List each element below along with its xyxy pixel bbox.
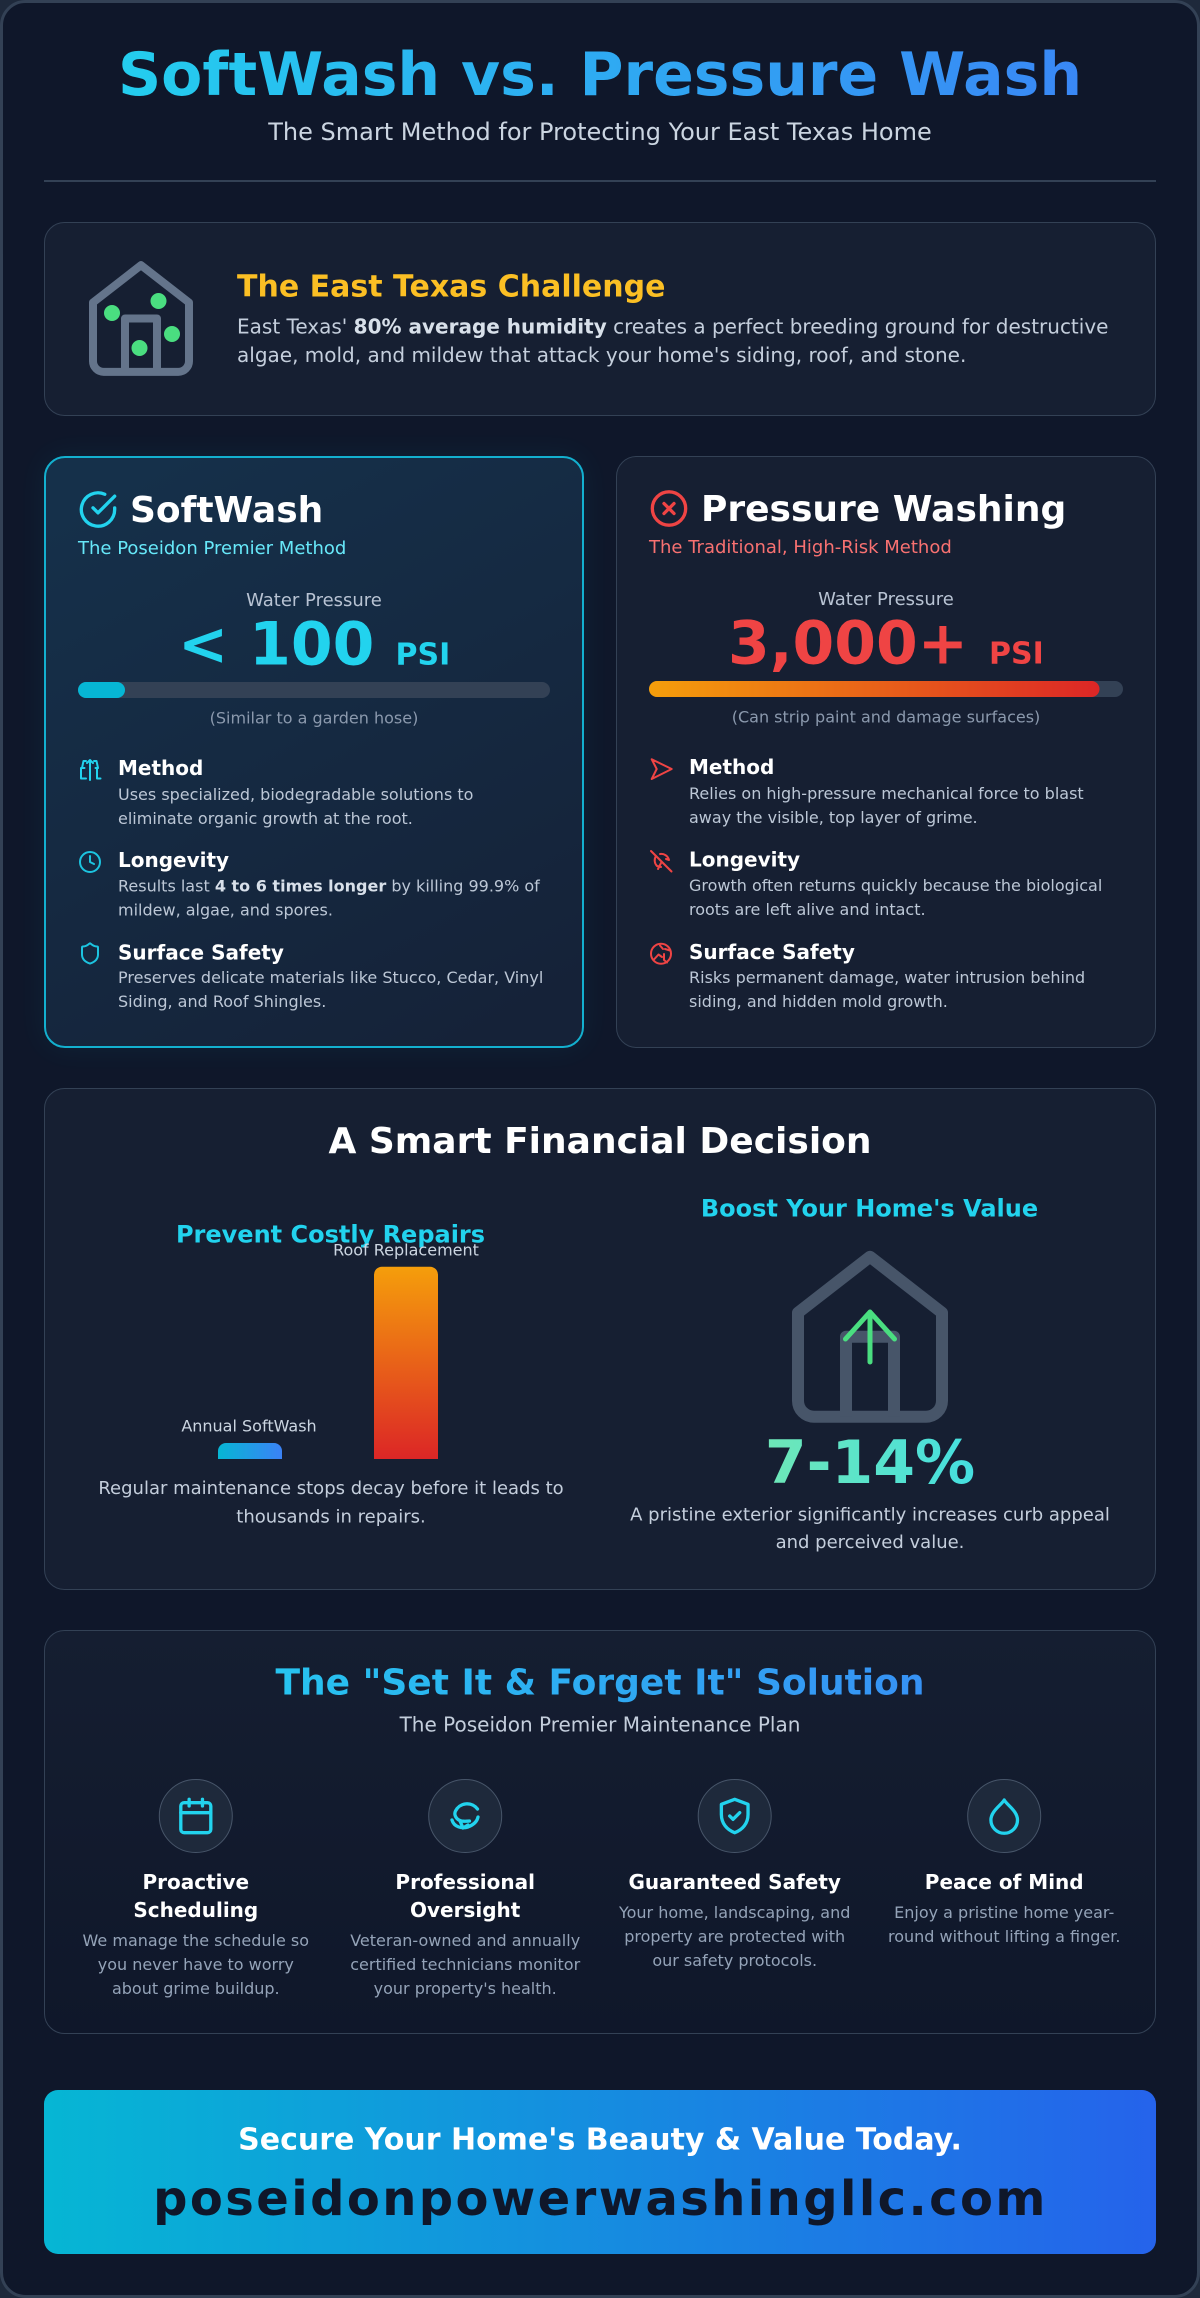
text: challenge body: East Texas' 80% average humidity creates a perfect breeding ground for destructive	[237, 314, 1108, 338]
feature: surface safety: Siding, and Roof Shingles.	[118, 992, 326, 1011]
feature: surface safety: siding, and hidden mold growth.	[689, 992, 948, 1011]
gauge: SoftWash pressure: < 100	[178, 610, 374, 680]
icon: blast arrow	[652, 759, 672, 779]
feature: method: Method	[118, 756, 203, 780]
gauge: pressure wash pressure: (Can strip paint and damage surfaces)	[732, 708, 1040, 726]
icon: check circle	[81, 493, 115, 526]
item: guaranteed safety: property are protected with	[624, 1927, 845, 1946]
feature: longevity: Results last 4 to 6 times longer by killing 99.9% of	[118, 876, 540, 896]
icon: shield	[82, 943, 98, 964]
item: professional oversight: Oversight	[410, 1898, 521, 1922]
icon: shield check	[721, 1799, 748, 1833]
item: proactive scheduling: about grime buildup.	[112, 1979, 280, 1998]
item: peace of mind	[888, 1780, 1120, 1946]
gauge: pressure wash pressure: 3,000+	[728, 608, 968, 678]
heading: financial: A Smart Financial Decision	[328, 1121, 872, 1162]
heading: Pressure Washing: Pressure Washing	[701, 489, 1066, 530]
subtitle: The Smart Method for Protecting Your East Texas Home	[267, 118, 932, 146]
item: professional oversight: Veteran-owned and annually	[350, 1931, 580, 1950]
item: proactive scheduling: Scheduling	[133, 1898, 258, 1922]
feature: longevity: roots are left alive and intact.	[689, 900, 926, 919]
item: proactive scheduling: We manage the schedule so	[83, 1931, 309, 1950]
icon: crossed refresh	[651, 851, 672, 872]
text: value description: A pristine exterior significantly increases curb appeal	[630, 1504, 1110, 1526]
stat: value increase: 7-14%	[765, 1428, 975, 1498]
feature: surface safety: Preserves delicate materials like Stucco, Cedar, Vinyl	[118, 968, 543, 987]
text: challenge body: algae, mold, and mildew that attack your home's siding, roof, and stone.	[237, 343, 966, 367]
text: website: poseidonpowerwashingllc.com	[153, 2171, 1048, 2227]
item: proactive scheduling: Proactive	[142, 1870, 249, 1894]
text: CTA headline: Secure Your Home's Beauty & Value Today.	[238, 2122, 962, 2158]
feature: method: eliminate organic growth at the root.	[118, 809, 413, 828]
feature: longevity: Growth often returns quickly because the biological	[689, 876, 1102, 895]
item: professional oversight	[350, 1780, 581, 1998]
icon: calendar	[181, 1799, 211, 1833]
feature: surface safety: Surface Safety	[118, 940, 284, 964]
panel: Pressure Washing	[616, 456, 1156, 1048]
text: repairs description: thousands in repairs.	[236, 1506, 426, 1528]
panel: financial decision	[44, 1088, 1156, 1590]
item: proactive scheduling	[83, 1780, 309, 1998]
text: plan subtitle: The Poseidon Premier Maintenance Plan	[399, 1712, 800, 1736]
panel: call to action	[44, 2090, 1156, 2254]
icon: water drop	[991, 1800, 1018, 1833]
subpanel: boost home value: Boost Your Home's Value	[701, 1194, 1038, 1222]
gauge: SoftWash pressure: (Similar to a garden hose)	[210, 708, 418, 728]
feature: method: Method	[689, 755, 774, 779]
gauge: pressure wash pressure: Water Pressure	[818, 589, 954, 610]
panel: set it and forget it	[44, 1630, 1156, 2034]
icon: refresh swirl	[452, 1804, 478, 1828]
feature: longevity: Longevity	[689, 848, 800, 872]
icon: house with mold spots	[93, 265, 189, 372]
item: peace of mind: round without lifting a finger.	[888, 1927, 1120, 1946]
item: guaranteed safety: our safety protocols.	[652, 1951, 817, 1970]
text: repairs description: Regular maintenance stops decay before it leads to	[98, 1478, 564, 1499]
text: SoftWash subtitle: The Poseidon Premier Method	[77, 538, 346, 559]
item: professional oversight: Professional	[395, 1870, 535, 1894]
item: peace of mind: Enjoy a pristine home year-	[894, 1903, 1114, 1922]
heading: challenge: The East Texas Challenge	[237, 270, 665, 304]
subpanel: prevent costly repairs	[98, 1220, 564, 1528]
feature: method	[81, 756, 473, 828]
bar chart: Annual SoftWash	[181, 1416, 317, 1436]
item: guaranteed safety: Guaranteed Safety	[628, 1870, 841, 1894]
feature: surface safety: Surface Safety	[689, 940, 855, 964]
feature: method: Uses specialized, biodegradable solutions to	[118, 785, 473, 804]
item: proactive scheduling: you never have to worry	[98, 1955, 294, 1974]
icon: house with up arrow	[798, 1257, 942, 1417]
title: SoftWash vs. Pressure Wash	[118, 40, 1082, 110]
feature: longevity	[80, 848, 540, 920]
bar chart: Roof Replacement	[333, 1240, 479, 1260]
feature: longevity: mildew, algae, and spores.	[118, 900, 333, 920]
item: professional oversight: your property's health.	[374, 1979, 557, 1998]
panel: SoftWash	[45, 457, 583, 1047]
item: guaranteed safety	[618, 1780, 850, 1970]
icon: clock	[80, 852, 100, 872]
heading: SoftWash: SoftWash	[130, 490, 323, 531]
subpanel: boost home value	[630, 1194, 1110, 1553]
icon: x circle	[652, 492, 686, 525]
icon: cracked circle	[651, 944, 671, 964]
gauge: SoftWash pressure: PSI	[396, 638, 450, 672]
subpanel: prevent costly repairs: Prevent Costly Repairs	[176, 1220, 485, 1248]
feature: surface safety	[82, 940, 543, 1011]
heading: plan: The "Set It & Forget It" Solution	[275, 1662, 925, 1704]
feature: longevity: Longevity	[118, 848, 229, 872]
bar chart	[181, 1240, 479, 1459]
icon: scales	[81, 760, 100, 780]
item: professional oversight: certified technicians monitor	[350, 1955, 581, 1974]
gauge: pressure wash pressure: PSI	[989, 636, 1044, 672]
item: peace of mind: Peace of Mind	[925, 1870, 1084, 1894]
text: Pressure Washing subtitle: The Traditional, High-Risk Method	[648, 537, 952, 558]
gauge: pressure wash pressure	[649, 589, 1123, 726]
text: value description: and perceived value.	[776, 1532, 964, 1553]
header	[118, 40, 1082, 146]
feature: method: Relies on high-pressure mechanical force to blast	[689, 784, 1084, 803]
item: guaranteed safety: Your home, landscaping, and	[618, 1903, 850, 1922]
feature: longevity	[651, 848, 1102, 919]
feature: surface safety	[651, 940, 1085, 1011]
gauge: SoftWash pressure	[78, 590, 550, 728]
feature: method	[652, 755, 1084, 827]
feature: surface safety: Risks permanent damage, water intrusion behind	[689, 968, 1085, 987]
panel: East Texas challenge	[44, 222, 1156, 416]
gauge: SoftWash pressure: Water Pressure	[246, 590, 382, 611]
feature: method: away the visible, top layer of grime.	[689, 808, 978, 827]
